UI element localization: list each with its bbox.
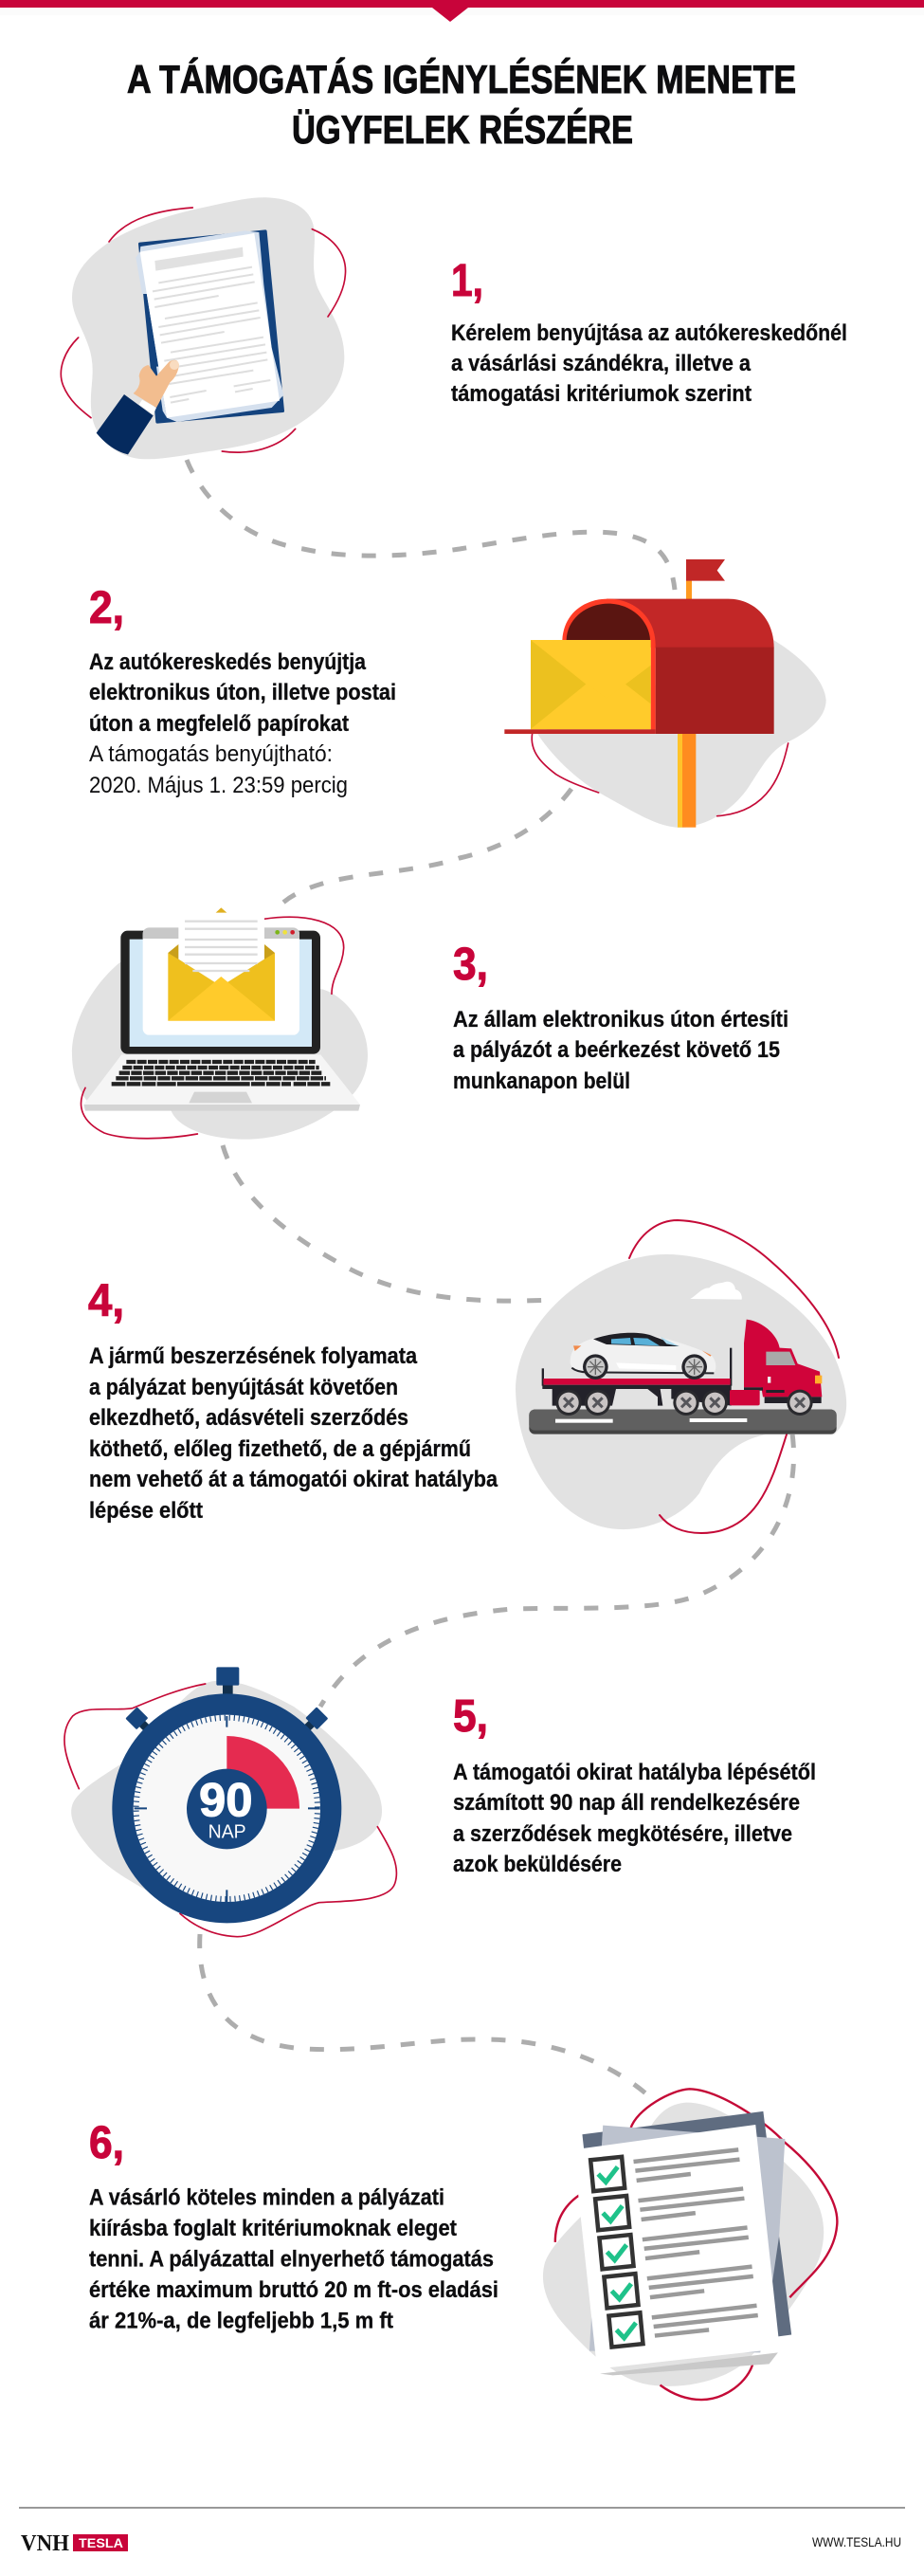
text block: step 1 (451, 320, 847, 407)
step number 2: 2, (89, 583, 124, 633)
footer logo: VNH (21, 2531, 69, 2556)
text block: step 5 (453, 1760, 816, 1877)
text block: step 3: Az állam elektronikus úton értesíti (453, 1007, 788, 1032)
text block: step 2: A támogatás benyújtható: (89, 741, 333, 767)
icon: stopwatch 90 nap: 90 (199, 1773, 253, 1826)
text block: step 2: elektronikus úton, illetve postai (89, 680, 396, 705)
dashed connector path (187, 460, 794, 2097)
step number 5: 5, (453, 1691, 488, 1742)
text block: step 6: kiírásba foglalt kritériumoknak eleget (89, 2216, 457, 2241)
title (127, 57, 796, 152)
text block: step 3 (453, 1007, 788, 1094)
text block: step 2 (89, 649, 396, 798)
text block: step 6 (89, 2184, 498, 2334)
title: ÜGYFELEK RÉSZÉRE (292, 107, 633, 152)
step number 6: 6, (89, 2118, 124, 2168)
panel: step 5 (64, 1667, 816, 1937)
icon: hand holding document (61, 197, 346, 459)
panel: step 1 (61, 197, 847, 459)
text block: step 4: lépése előtt (89, 1498, 203, 1524)
footer logo: TESLA (79, 2535, 123, 2550)
panel: step 2 (89, 559, 826, 828)
text block: step 6: értéke maximum bruttó 20 m ft-os eladási (89, 2277, 498, 2303)
panel: step 3 (72, 907, 788, 1140)
text block: step 6: A vásárló köteles minden a pályázati (89, 2184, 444, 2211)
text block: step 6: ár 21%-a, de legfeljebb 1,5 m ft (89, 2308, 393, 2334)
panel: step 4 (88, 1220, 846, 1533)
text block: step 2: úton a megfelelő papírokat (89, 711, 349, 737)
text block: step 5: számított 90 nap áll rendelkezésére (453, 1790, 800, 1816)
text block: step 4: köthető, előleg fizethető, de a gépjármű (89, 1436, 471, 1462)
footer logo (21, 2531, 128, 2556)
panel: step 6 (89, 2089, 837, 2400)
icon: stopwatch 90 nap (64, 1667, 396, 1937)
text block: step 2: Az autókereskedés benyújtja (89, 649, 367, 675)
text block: step 5: azok beküldésére (453, 1852, 622, 1877)
text block: step 4: elkezdhető, adásvételi szerződés (89, 1405, 408, 1431)
text block: step 4: nem vehető át a támogatói okirat hatályba (89, 1467, 498, 1492)
text block: step 4 (89, 1343, 498, 1524)
text block: step 5: A támogatói okirat hatályba lépésétől (453, 1760, 816, 1785)
top bar with pointer (0, 0, 924, 22)
text block: step 1: Kérelem benyújtása az autókereskedőnél (451, 320, 847, 346)
text block: step 5: a szerződések megkötésére, illetve (453, 1821, 792, 1847)
text block: step 1: támogatási kritériumok szerint (451, 381, 752, 407)
footer url: WWW.TESLA.HU (812, 2534, 901, 2549)
step number 3: 3, (453, 940, 488, 990)
title: A TÁMOGATÁS IGÉNYLÉSÉNEK MENETE (127, 57, 796, 101)
step number 1: 1, (451, 256, 483, 306)
icon: truck carrying car (516, 1220, 846, 1533)
icon: mailbox with envelope (504, 559, 826, 828)
text block: step 3: munkanapon belül (453, 1069, 630, 1094)
text block: step 6: tenni. A pályázattal elnyerhető támogatás (89, 2247, 494, 2272)
icon: laptop with envelope (72, 907, 368, 1140)
text block: step 4: a pályázat benyújtását követően (89, 1375, 398, 1400)
text block: step 1: a vásárlási szándékra, illetve a (451, 351, 752, 376)
step number 4: 4, (88, 1276, 124, 1326)
text block: step 3: a pályázót a beérkezést követő 15 (453, 1037, 780, 1063)
text block: step 2: 2020. Május 1. 23:59 percig (89, 773, 348, 798)
text block: step 4: A jármű beszerzésének folyamata (89, 1343, 418, 1369)
icon: checklist (543, 2089, 837, 2400)
icon: stopwatch 90 nap: NAP (208, 1820, 246, 1842)
